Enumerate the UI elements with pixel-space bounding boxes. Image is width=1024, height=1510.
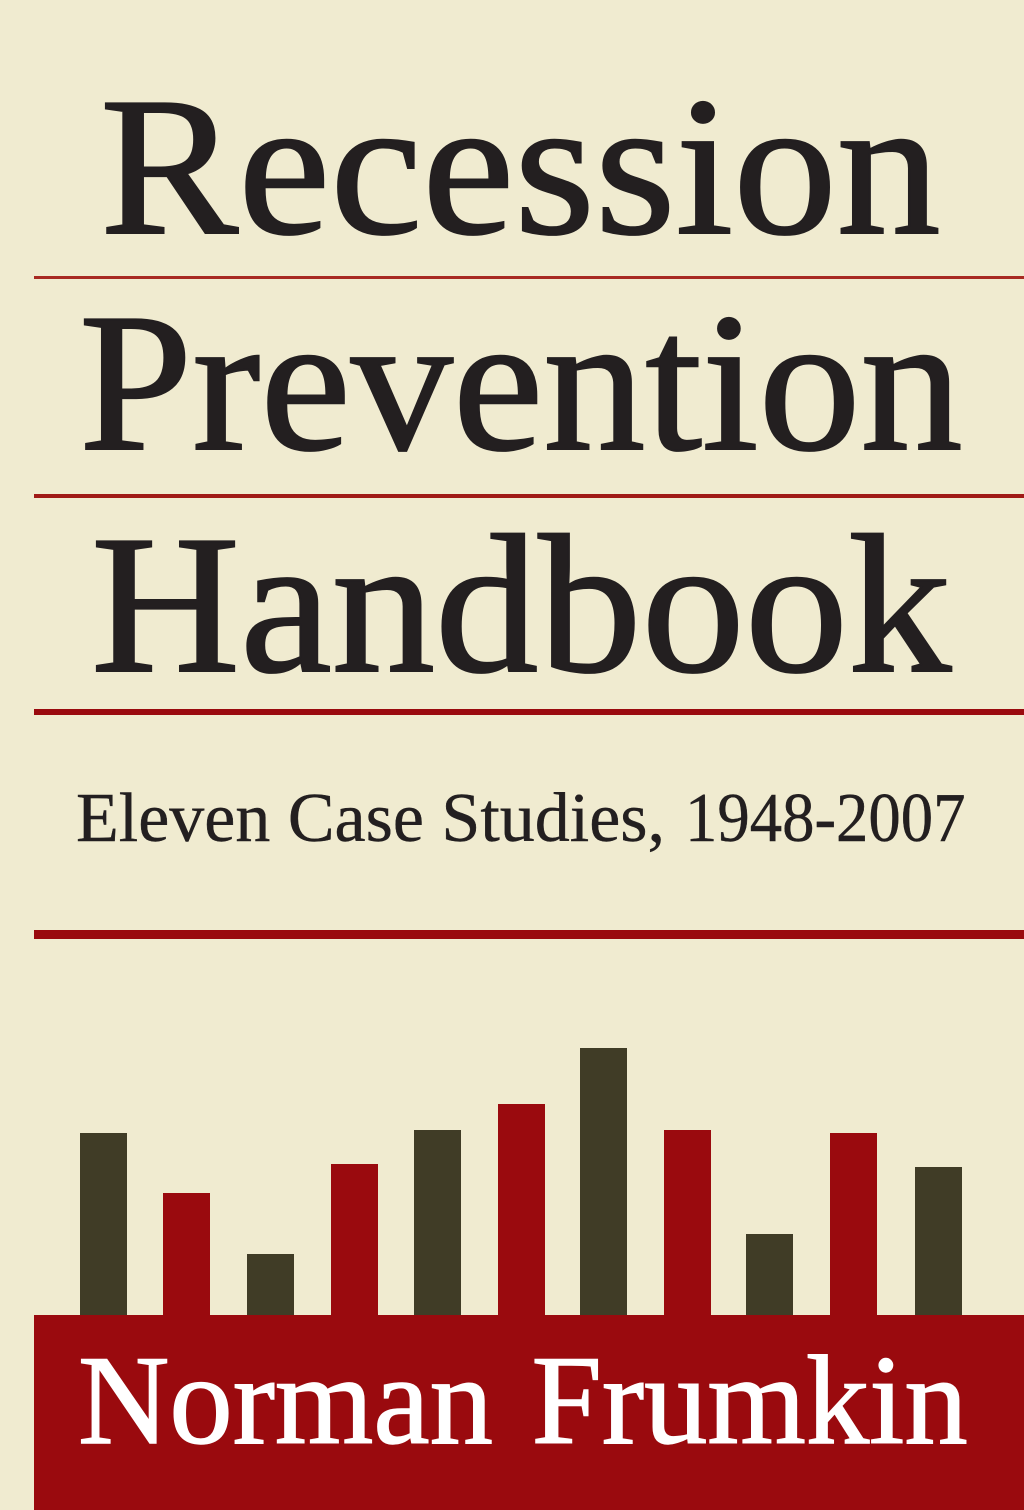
subtitle: Eleven Case Studies, xyxy=(76,780,665,857)
bar chart xyxy=(80,1048,962,1316)
author name: Norman Frumkin xyxy=(78,1331,968,1471)
title: Recession: Recession xyxy=(100,56,940,276)
subtitle: 1948-2007 xyxy=(685,779,965,857)
author panel xyxy=(34,1315,1024,1510)
title: Handbook: Handbook xyxy=(91,495,952,714)
subtitle xyxy=(76,779,965,857)
title: Prevention: Prevention xyxy=(79,274,963,492)
